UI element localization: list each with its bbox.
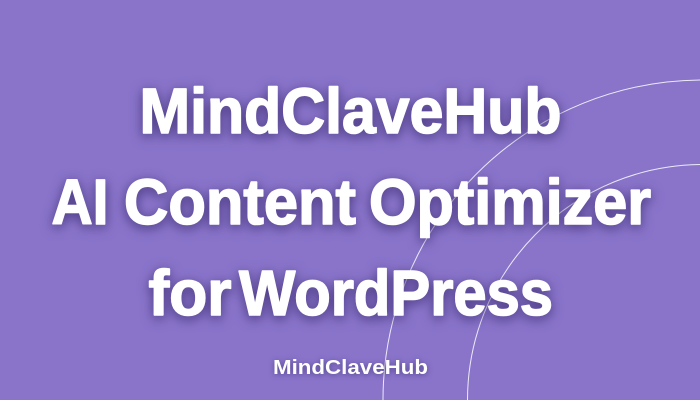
title: MindClaveHub — [140, 75, 562, 147]
title: WordPress — [239, 257, 553, 329]
decorative concentric arcs — [383, 80, 700, 400]
title — [52, 75, 651, 329]
title: for — [148, 257, 232, 329]
title: Optimizer — [369, 166, 651, 238]
title: Content — [124, 166, 356, 238]
brand name footer: MindClaveHub — [273, 356, 428, 379]
title: AI — [52, 166, 108, 238]
